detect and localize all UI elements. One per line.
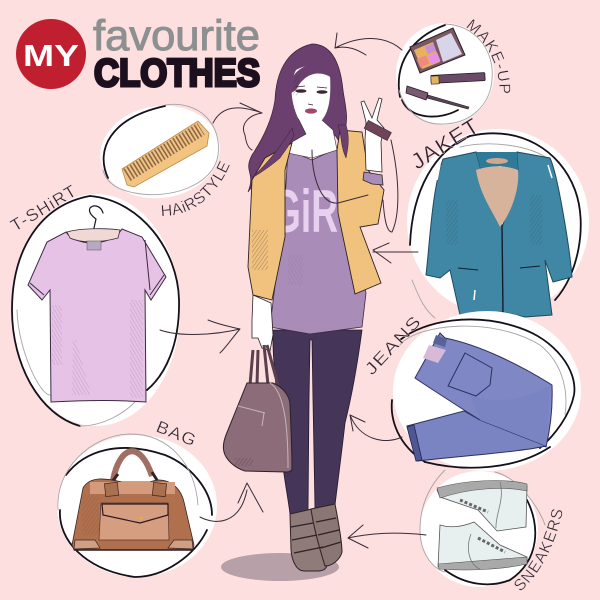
face — [288, 64, 332, 125]
earphone wire — [312, 140, 398, 232]
arrow: make-up — [335, 33, 402, 55]
icon: hanger — [89, 206, 103, 228]
GiR print: GiR — [272, 178, 338, 245]
icon: mascara tube — [431, 73, 485, 84]
icon: t-shirt — [28, 229, 166, 402]
arrow: t-shirt — [160, 320, 240, 353]
left hand — [252, 295, 273, 351]
panel: t-shirt — [12, 194, 180, 426]
icon: eyeshadow palette — [410, 28, 465, 73]
shadow — [221, 553, 339, 581]
heading: favourite: favourite — [93, 12, 260, 60]
icon: comb — [122, 121, 209, 187]
arrow: jeans — [350, 415, 402, 441]
icon: blue jeans — [407, 333, 552, 461]
panel: jeans — [392, 311, 581, 471]
arrow: hairstyle — [213, 103, 262, 150]
arrow: sneakers — [348, 525, 426, 548]
label: t-shirt: T-SHiRT — [7, 181, 80, 235]
icon: teal jacket — [426, 152, 572, 317]
panel: make-up — [396, 23, 494, 125]
label: sneakers: SNEAKERS — [514, 509, 562, 590]
panel: hairstyle comb — [94, 98, 226, 206]
label: jaket: JAKET — [406, 113, 484, 174]
arrow: bag — [200, 483, 263, 521]
handbag on figure — [223, 345, 292, 472]
panel: bag — [57, 434, 217, 577]
icon: upper sneaker — [437, 481, 527, 531]
t-shirt body — [270, 148, 366, 334]
figure: girl — [221, 44, 398, 581]
boots — [290, 504, 342, 571]
icon: lower sneaker — [438, 522, 527, 570]
hair back — [248, 44, 350, 192]
leggings — [273, 330, 362, 514]
panel: jacket — [407, 129, 589, 318]
label: bag: BAG — [154, 417, 200, 450]
icon: brown handbag — [72, 451, 194, 550]
label: jeans: JEANS — [361, 312, 425, 379]
right hand with peace sign — [361, 98, 391, 185]
label: hairstyle: HAiRSTYLE — [162, 160, 230, 216]
icon: mascara wand — [406, 86, 469, 109]
red badge: MY: MY — [23, 38, 79, 73]
heading: CLOTHES: CLOTHES — [94, 52, 260, 95]
red badge: MY — [16, 19, 86, 89]
jacket left sleeve shading — [252, 230, 268, 270]
jacket left panel — [248, 143, 292, 300]
panel: sneakers — [420, 470, 545, 587]
jacket right panel — [337, 130, 384, 294]
title: my favourite clothes — [16, 12, 260, 95]
hair strands over jacket — [252, 125, 348, 178]
chest and neck — [288, 118, 337, 158]
arrow: jacket — [373, 243, 418, 263]
label: make-up: MAKE-UP — [466, 19, 510, 94]
